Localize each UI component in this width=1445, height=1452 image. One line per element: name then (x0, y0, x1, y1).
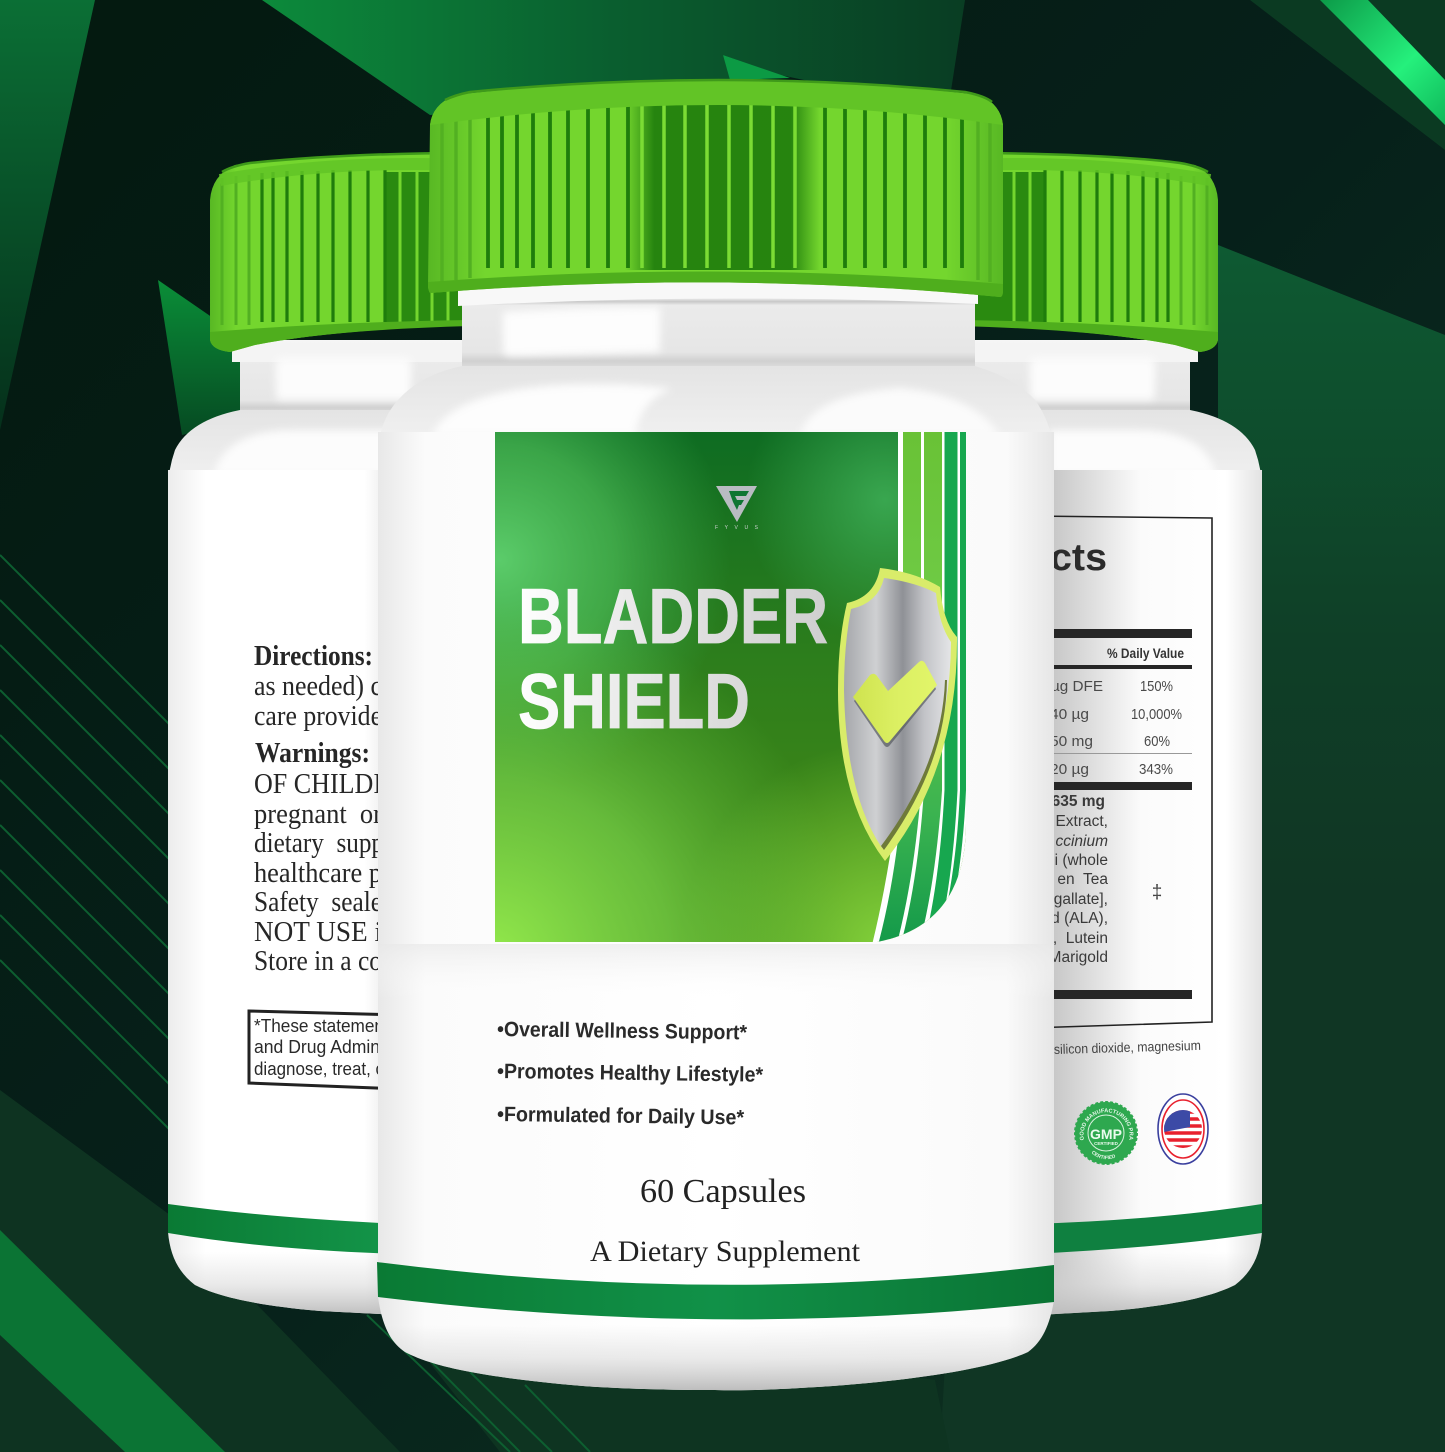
supplement facts panel (1030, 516, 1212, 1028)
icon: GMP certified seal: GMP (1090, 1126, 1122, 1142)
supplement line: A Dietary Supplement (590, 1235, 861, 1268)
directions text: Safety seale (254, 886, 382, 918)
supplement facts panel: 150% (1140, 678, 1173, 695)
front bottle cap (428, 80, 1003, 297)
icon: brand logo (715, 486, 759, 531)
directions text: dietary supp (254, 827, 384, 859)
directions text: NOT USE i (254, 916, 382, 948)
product title: SHIELD (518, 657, 750, 745)
benefit bullets: •Overall Wellness Support* (497, 1018, 748, 1045)
supplement facts panel: 60% (1144, 733, 1170, 750)
directions text: OF CHILDI (254, 768, 382, 800)
ingredient list: d (ALA), (1051, 910, 1108, 927)
benefit bullets: •Formulated for Daily Use* (497, 1103, 745, 1129)
directions text (254, 641, 384, 977)
ingredient list: Marigold (1049, 949, 1108, 966)
front bottle green band (377, 1262, 1054, 1319)
disclaimer box: and Drug Admini (254, 1037, 384, 1057)
supplement facts panel: µg DFE (1051, 678, 1103, 695)
icon: GMP certified seal: GOOD MANUFACTURING PRACTICE (1080, 1108, 1134, 1140)
front bottle neck and shoulder (378, 277, 1054, 450)
right bottle body (1020, 470, 1262, 1316)
directions text: Store in a co (254, 945, 382, 977)
supplement facts panel: 40 µg (1050, 706, 1089, 723)
ingredient list: i (whole (1055, 852, 1108, 869)
front bottle body (378, 432, 1054, 1390)
capsule count: 60 Capsules (640, 1173, 806, 1210)
benefit bullets: •Promotes Healthy Lifestyle* (497, 1060, 764, 1087)
disclaimer box (249, 1011, 400, 1089)
ingredient list: , Lutein (1053, 930, 1108, 947)
other ingredients line: silicon dioxide, magnesium (1054, 1038, 1201, 1057)
left bottle green band (168, 1204, 400, 1254)
left bottle base shading (180, 1264, 382, 1314)
cap top rim (430, 80, 1003, 125)
supplement facts panel: ‡ (1152, 882, 1162, 903)
right bottle cap (960, 153, 1218, 352)
directions text: Directions: (254, 641, 373, 672)
product title: BLADDER (518, 572, 828, 660)
left bottle neck and shoulder (168, 340, 470, 490)
icon: GMP certified seal: CERTIFIED (1092, 1150, 1116, 1160)
daily value heading: % Daily Value (1107, 646, 1184, 661)
directions text: as needed) c (254, 670, 382, 702)
left bottle body (168, 470, 420, 1316)
front bottle base shading (392, 1338, 1040, 1390)
heading fragment: cts (1050, 537, 1107, 579)
cap lower rim (428, 271, 1003, 297)
directions text: Warnings: (255, 738, 370, 769)
icon: GMP certified seal: CERTIFIED (1094, 1141, 1119, 1146)
right bottle neck and shoulder (960, 340, 1262, 490)
ingredient list: 635 mg (1052, 793, 1105, 810)
icon: shield with check (838, 568, 957, 861)
supplement facts panel: 50 mg (1050, 733, 1093, 750)
icon: GMP certified seal (1074, 1101, 1138, 1165)
directions text: pregnant or (254, 798, 382, 830)
right bottle green band (1030, 1204, 1262, 1254)
directions text: care provide (254, 700, 382, 732)
shading below label (378, 944, 1054, 999)
benefit bullets (497, 1018, 764, 1129)
ingredient list: gallate], (1054, 891, 1108, 908)
ingredient list: ccinium (1055, 833, 1108, 850)
supplement facts panel: 343% (1139, 761, 1173, 778)
front bottle (377, 80, 1054, 1391)
right bottle: supplement facts side (975, 152, 1262, 1314)
product title (518, 572, 828, 745)
icon: USA flag seal (1158, 1094, 1208, 1164)
disclaimer box: *These statemen (254, 1016, 384, 1036)
disclaimer box: diagnose, treat, c (254, 1059, 384, 1079)
front label green panel (495, 432, 966, 942)
supplement facts panel: 20 µg (1050, 761, 1089, 778)
left bottle cap (210, 153, 470, 352)
left bottle: directions and warnings side (168, 153, 470, 1316)
right bottle base shading (1051, 1264, 1251, 1314)
ingredient list (1049, 793, 1108, 966)
supplement facts panel: 10,000% (1131, 706, 1182, 723)
ingredient list: en Tea (1057, 871, 1108, 888)
icon: brand logo: FYVUS (715, 525, 759, 531)
directions text: healthcare p (254, 857, 382, 889)
ingredient list: Extract, (1055, 813, 1108, 830)
decorative curved stripes (872, 425, 970, 950)
